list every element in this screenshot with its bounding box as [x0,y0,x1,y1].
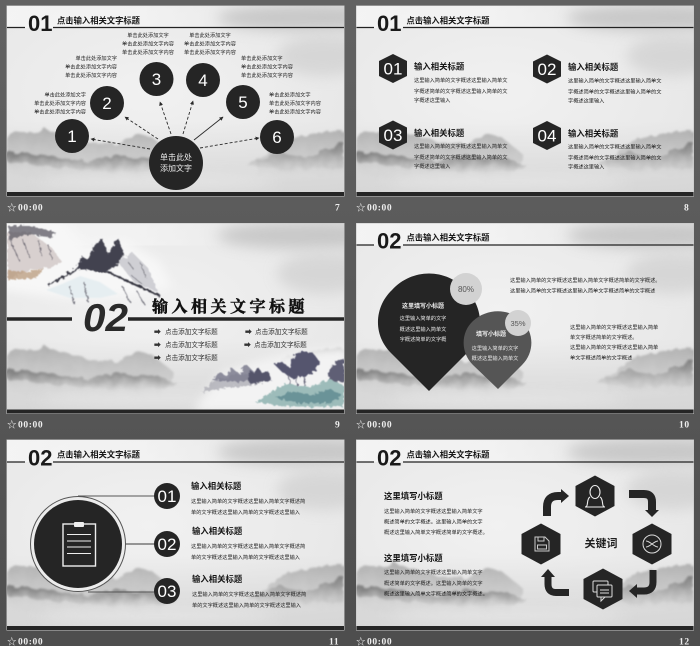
small pin 35% [464,311,531,389]
slide 10 background [356,222,700,414]
text block 2: 概述这里输入简单文字概述简单的文字概述。 [384,590,488,598]
item 02: 字概述简单的文字概述这里输入简单的文 [568,88,662,96]
slide 9 footer: 9 [335,420,340,430]
arrow: left to top [547,489,569,516]
text block 2: 概述简单的文字概述。这里输入简单的文字 [384,579,483,587]
percent bubble 80%: 80% [458,285,474,294]
percent bubble 80% [450,273,482,305]
slide 9 footer [7,420,340,431]
item 02: 02 [158,535,176,554]
slide 11 header [7,446,344,470]
slide 12 header [356,446,694,470]
slide 7 footer: 00:00 [18,204,43,214]
slide 12 background [356,439,700,630]
numbered circles 1 to 6: 5 [238,93,248,112]
divider line [7,317,344,321]
icon: chat [593,581,612,601]
slide 10 header: 02 [377,228,401,254]
label text groups: 单击此处添加文字内容 [65,71,117,79]
label text groups: 单击此处添加文字内容 [184,48,236,56]
label text groups [34,31,321,116]
large pin 80% [378,274,480,391]
item 02: 这里输入简单的文字概述这里输入简单文字概述简 [191,542,305,550]
large pin 80%: 概述这里输入简单文 [400,325,447,333]
item 04: 输入相关标题 [568,128,619,138]
dashed connector arrows [91,101,259,149]
slide 7 background [6,5,377,196]
text block lower: 这里输入简单的文字概述这里输入简单 [570,343,658,351]
label text groups: 单击此处添加文字内容 [34,108,86,116]
label text groups: 单击此处添加文字内容 [122,40,174,48]
item 01: 单的文字概述这里输入简单的文字概述这里输入 [191,508,300,516]
panel: slide 12 keyword cycle [356,439,700,646]
label text groups: 单击此处添加文字内容 [65,62,117,70]
ink trees and teal hills bottom right [195,346,350,412]
arrow: right to bottom [629,570,653,598]
icon: shuffle [643,535,661,553]
bullet list: 点击添加文字标题 [165,353,218,362]
panel: slide 11 list with clipboard [6,439,377,646]
slide 10 footer: 10 [679,420,690,430]
bullet list: ➡ [154,355,161,362]
small pin 35%: 这里输入简单的文字 [472,344,518,352]
percent bubble 35% [505,310,531,336]
text block lower: 单文字概述简单的文字概述。 [570,333,637,341]
keyword: 关键词 [584,536,618,550]
slide 10 header: 点击输入相关文字标题 [406,232,490,242]
panel: slide 8 four items [356,5,700,214]
section number 02: 02 [83,297,128,340]
item 04: 这里输入简单的文字概述这里输入简单文 [568,142,662,150]
slide 11 header: 点击输入相关文字标题 [57,450,141,460]
text block 1: 概述简单的文字概述。这里输入简单的文字 [384,518,483,526]
text block 2: 这里输入简单的文字概述这里输入简单文字 [384,568,483,576]
text block 2 [384,553,488,598]
item 03 [379,120,508,170]
text block 1 [384,491,488,536]
slide 9 footer: 00:00 [18,420,43,430]
item 03: 字概述简单的文字概述这里输入简单的文 [414,153,508,161]
text block lower [570,323,658,362]
item 01: 输入相关标题 [191,481,242,491]
icon: user [585,486,605,507]
slide 10 footer: ☆ [356,420,366,431]
large pin 80%: 这里输入简单的文字 [400,314,446,322]
small pin 35%: 概述这里输入简单文 [472,354,519,362]
slide 7 header: 点击输入相关文字标题 [57,16,141,26]
label text groups: 单击此处添加文字内容 [269,99,321,107]
text block 1: 这里输入简单的文字概述这里输入简单文字 [384,507,483,515]
bullet list: ➡ [154,342,161,349]
item 01 [379,54,508,104]
slide 7 header [7,11,344,36]
item 02 [533,54,662,104]
section title: 输入相关文字标题 [152,297,308,316]
numbered circles 1 to 6: 3 [152,70,161,89]
slide 11 footer [7,637,339,646]
numbered circles 1 to 6: 6 [272,128,282,147]
item 01: 这里输入简单的文字概述这里输入简单文 [414,76,508,84]
item 01 [154,481,305,516]
label text groups: 单击此处添加文字内容 [269,108,321,116]
bullet list: 点击添加文字标题 [255,327,308,336]
slide 11 header: 02 [28,446,52,470]
item 04: 04 [538,126,556,146]
slide 12 header: 点击输入相关文字标题 [406,450,490,460]
bullet list: ➡ [244,342,251,349]
hexagon: save [522,524,560,564]
slide 10 footer [356,420,690,431]
item 02: 字概述这里输入 [568,96,604,104]
hexagon: shuffle [632,524,672,564]
item 01: 字概述简单的文字概述这里输入简单的文 [414,87,508,95]
item 03 [154,574,306,609]
centre circle: 添加文字 [160,163,192,173]
text block upper [510,276,660,294]
item 01: 输入相关标题 [414,62,465,72]
numbered circles 1 to 6: 2 [102,94,112,113]
percent bubble 35%: 35% [510,319,526,328]
small pin 35%: 填写小标题 [476,330,506,338]
item 04 [533,121,662,170]
connector lines [78,496,156,592]
slide 9 footer: ☆ [7,420,17,431]
slide 8 footer: ☆ [356,203,366,214]
item 01: 01 [384,60,402,78]
slide 9 background [6,222,377,414]
text block 2: 这里填写小标题 [384,553,443,563]
item 02: 输入相关标题 [568,62,619,72]
item 03: 这里输入简单的文字概述这里输入简单文字概述简 [192,590,306,598]
icon: clipboard [63,522,96,566]
slide 7 footer: ☆ [7,203,17,214]
label text groups: 单击此处添加文字 [127,31,169,39]
item 01: 字概述这里输入 [414,96,450,104]
hexagon: user [576,476,614,516]
text block lower: 单文字概述简单的文字概述 [570,354,632,362]
slide 8 footer: 8 [684,204,689,214]
text block upper: 这里输入简单的文字概述这里输入简单文字概述简单的文字概述 [510,286,655,294]
label text groups: 单击此处添加文字 [241,54,283,62]
item 03: 这里输入简单的文字概述这里输入简单文 [414,142,508,150]
label text groups: 单击此处添加文字内容 [241,62,293,70]
icon: floppy disk [535,537,549,551]
item 02: 输入相关标题 [192,526,243,536]
item 03: 03 [158,582,176,601]
item 03: 单的文字概述这里输入简单的文字概述这里输入 [192,601,301,609]
label text groups: 单击此处添加文字 [189,31,231,39]
text block 1: 这里填写小标题 [384,491,443,501]
bullet list: 点击添加文字标题 [165,327,218,336]
bullet list: 点击添加文字标题 [254,340,307,349]
text block upper: 这里输入简单的文字概述这里输入简单文字概述简单的文字概述。 [510,276,660,284]
panel: slide 9 section divider [6,223,344,429]
item 03: 03 [384,126,402,145]
slide 8 header: 01 [377,11,401,36]
label text groups: 单击此处添加文字内容 [184,40,236,48]
ink mountain top left [7,224,161,306]
numbered circles 1 to 6 [55,62,294,154]
label text groups: 单击此处添加文字内容 [34,99,86,107]
large pin 80%: 字概述简单的文字概 [400,335,446,343]
hexagon: chat [584,568,622,610]
slide 10 header [356,228,694,254]
label text groups: 单击此处添加文字内容 [241,71,293,79]
item 01: 这里输入简单的文字概述这里输入简单文字概述简 [191,497,305,505]
label text groups: 单击此处添加文字 [269,90,311,98]
numbered circles 1 to 6: 4 [198,71,208,90]
numbered circles 1 to 6: 1 [67,127,77,146]
label text groups: 单击此处添加文字 [75,54,117,62]
item 02: 02 [538,60,556,79]
slide 8 header: 点击输入相关文字标题 [406,16,490,26]
clipboard circle [30,496,126,592]
panel: slide 10 pin chart [356,222,700,431]
text block lower: 这里输入简单的文字概述这里输入简单 [570,323,658,331]
slide 12 header: 02 [377,446,401,470]
slide 8 footer [356,203,689,214]
bullet list [154,327,308,362]
item 01: 01 [158,487,176,506]
slide 7 footer: 7 [335,204,340,214]
bullet list: ➡ [154,329,161,336]
item 04: 字概述这里输入 [568,162,604,170]
slide 7 header: 01 [28,11,52,36]
label text groups: 单击此处添加文字 [44,90,86,98]
item 03: 输入相关标题 [192,574,243,584]
item 02: 单的文字概述这里输入简单的文字概述这里输入 [191,553,300,561]
item 02 [154,526,305,561]
panel: slide 7 radial diagram [6,5,377,214]
slide 7 footer [7,203,340,214]
item 03: 字概述这里输入 [414,162,450,170]
bullet list: 点击添加文字标题 [165,340,218,349]
slide 8 footer: 00:00 [367,204,392,214]
label text groups: 单击此处添加文字内容 [122,48,174,56]
large pin 80%: 这里填写小标题 [402,302,444,310]
item 03: 输入相关标题 [414,128,465,138]
item 04: 字概述简单的文字概述这里输入简单的文 [568,154,662,162]
slide 12 footer [356,637,690,646]
slide 8 header [356,11,694,36]
slide 8 background [356,5,700,196]
item 02: 这里输入简单的文字概述这里输入简单文 [568,76,662,84]
centre circle: 单击此处 [160,152,192,162]
slide 10 footer: 00:00 [367,420,392,430]
bullet list: ➡ [245,329,252,336]
slide 11 background [6,439,377,630]
arrow: bottom to left [541,569,569,592]
centre circle [149,136,203,190]
text block 1: 概述这里输入简单文字概述简单的文字概述。 [384,528,488,536]
arrow: top to right [629,494,659,517]
